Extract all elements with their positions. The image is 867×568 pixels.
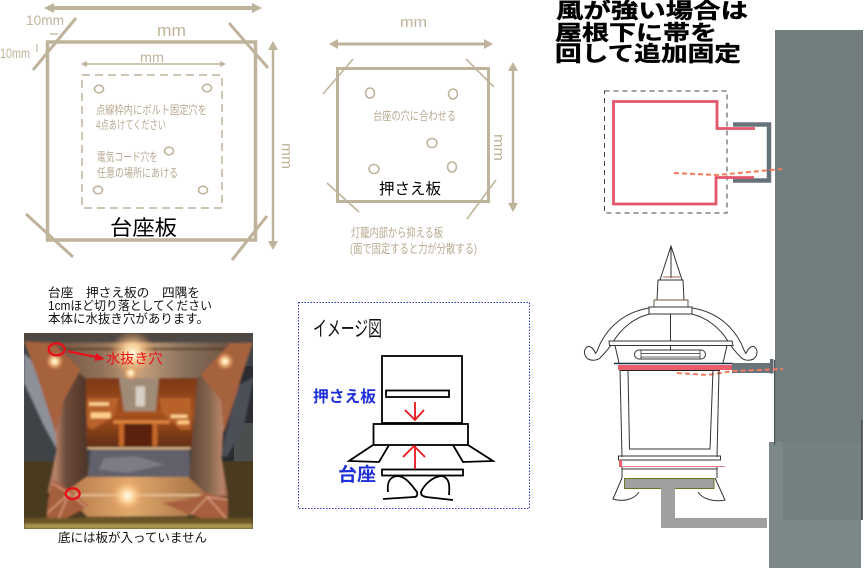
top band [42, 342, 236, 378]
diagram title: イメージ図 [313, 317, 382, 341]
corner dimension labels: 10mm [26, 12, 64, 28]
photo: copper lantern interior [24, 333, 253, 529]
height arrow [508, 62, 518, 212]
plate note [350, 225, 477, 256]
plate note: (面で固定すると力が分散する) [350, 241, 477, 256]
caption: photo notes: 台座 押さえ板の 四隅を [48, 285, 200, 300]
top corners [24, 341, 81, 433]
plastic sheet [24, 353, 61, 456]
bottom tray [64, 477, 211, 517]
dotted frame [298, 302, 530, 508]
plate name: 台座板 [110, 217, 177, 240]
caption: photo notes: 1cmほど切り落としてください [48, 299, 212, 313]
panel: base plate diagram [0, 3, 295, 260]
top dimension label: mm [400, 14, 427, 31]
caption: no bottom plate: 底には板が入っていません [58, 530, 207, 545]
top view: fixing detail [604, 91, 782, 213]
arrow to drain hole label [68, 351, 105, 361]
inner dimension arrow and label: mm [140, 49, 164, 65]
blue labels: 押さえ板 [313, 388, 376, 406]
inner bright panels [87, 398, 119, 430]
feet [613, 478, 725, 501]
blue labels: 台座 [338, 464, 376, 485]
grey band bracket [733, 124, 769, 180]
grey mount [624, 478, 767, 528]
drain hole label: 水抜き穴 [106, 351, 163, 367]
instruction text: 任意の場所にあける [97, 166, 178, 180]
lantern body [620, 370, 719, 457]
floor sheet [87, 450, 191, 478]
corner cut lines [26, 18, 268, 260]
corner cut lines [323, 59, 496, 219]
caption: photo notes: 本体に水抜き穴があります。 [48, 311, 209, 326]
right dimension label: mm [278, 143, 295, 169]
inner dimension arrow and label [81, 49, 226, 67]
lantern side view [584, 246, 783, 528]
red circles [49, 343, 80, 499]
base bands [618, 456, 725, 478]
panel: pressing plate diagram [323, 14, 518, 256]
lantern outline [349, 356, 493, 500]
right height arrow [268, 41, 278, 250]
upper bands [614, 359, 774, 374]
base plate outline [48, 42, 256, 240]
width arrow [329, 39, 493, 49]
red arrows [403, 402, 425, 469]
lantern slot [634, 350, 706, 359]
instruction text: 4点あけてください [96, 118, 166, 132]
heading: wind note [555, 0, 748, 66]
heading: wind note: 風が強い場合は [556, 0, 748, 23]
plate name: 押さえ板 [379, 180, 441, 198]
dashed outline [604, 91, 727, 213]
height label: mm [490, 134, 507, 161]
corner dimension labels: 10mm [0, 45, 30, 61]
holes [366, 88, 458, 174]
top dimension label: mm [157, 21, 186, 40]
corner dimension labels [0, 12, 64, 61]
plate note: 灯籠内部から抑える板 [351, 225, 443, 240]
top width arrow [44, 3, 262, 13]
light glows [45, 330, 234, 514]
panel: image diagram [298, 302, 530, 508]
blue labels [313, 388, 376, 485]
hole note: 台座の穴に合わせる [373, 108, 456, 123]
photo background [24, 333, 253, 529]
plate outline [338, 68, 488, 202]
corner fans [46, 480, 89, 524]
bolt holes [94, 84, 212, 194]
left column [47, 348, 87, 493]
bottom strip [24, 518, 253, 529]
orange dashed line [677, 369, 783, 375]
caption: photo notes [48, 285, 212, 326]
right column [189, 348, 230, 496]
red lantern outline [614, 102, 755, 204]
orange dashed line [674, 169, 782, 175]
dashed bolt area [82, 75, 222, 208]
inner shrine frame [113, 420, 170, 424]
heading: wind note: 屋根下に帯を [555, 22, 717, 45]
instruction text [96, 102, 207, 180]
instruction text: 点線枠内にボルト固定穴を [96, 102, 207, 117]
back wall [86, 378, 197, 450]
heading: wind note: 回して追加固定 [555, 43, 741, 66]
instruction text: 電気コード穴を [97, 149, 158, 164]
spire [649, 246, 692, 314]
roof with curled eaves [584, 308, 757, 363]
inner plate [119, 378, 159, 411]
wall [769, 30, 863, 568]
